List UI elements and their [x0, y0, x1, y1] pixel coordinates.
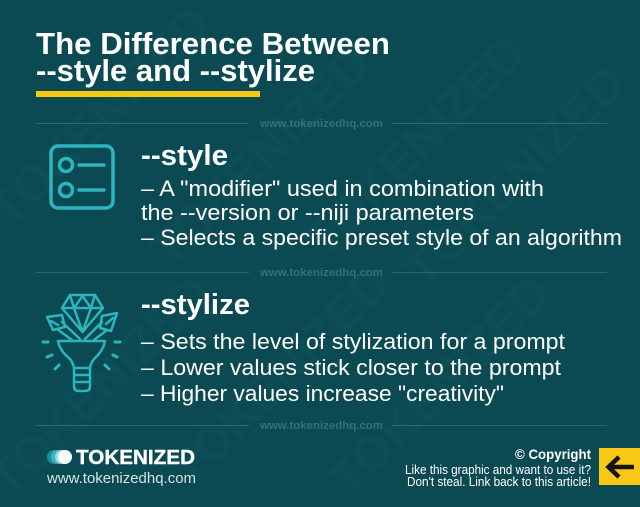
divider url 2: www.tokenizedhq.com — [259, 267, 383, 279]
yellow arrow box — [599, 448, 640, 485]
infographic canvas: TOKENIZED — [293, 25, 536, 268]
logo wordmark: TOKENIZED — [76, 446, 195, 469]
title underline — [36, 91, 260, 97]
divider url 3: www.tokenizedhq.com — [259, 420, 383, 432]
title — [36, 26, 390, 88]
copyright note: Like this graphic and want to use it? — [405, 462, 591, 477]
copyright heading: © Copyright — [515, 446, 591, 462]
style description — [141, 176, 622, 250]
stylize description: – Higher values increase "creativity" — [141, 381, 504, 406]
heading: style: --style — [141, 140, 228, 172]
logo mark — [47, 450, 72, 464]
title: The Difference Between — [36, 26, 390, 61]
infographic canvas: TOKENIZED — [138, 35, 381, 278]
stylize description: – Sets the level of stylization for a prompt — [141, 329, 566, 354]
divider url 1: www.tokenizedhq.com — [259, 118, 383, 130]
logo url: www.tokenizedhq.com — [46, 471, 196, 487]
infographic canvas: TOKENIZED — [318, 265, 561, 507]
style description: the --version or --niji parameters — [141, 200, 474, 225]
infographic canvas: TOKENIZED — [158, 255, 401, 498]
copyright note — [405, 462, 591, 489]
style description: – Selects a specific preset style of an algorithm — [141, 225, 622, 250]
title: --style and --stylize — [36, 53, 315, 88]
stylize description — [141, 329, 566, 406]
heading: stylize: --stylize — [141, 289, 250, 321]
infographic canvas: TOKENIZED — [393, 55, 636, 298]
icon: diamond, brushes and bulb — [43, 295, 120, 391]
style description: – A "modifier" used in combination with — [141, 176, 544, 201]
logo — [46, 446, 196, 487]
icon: list — [51, 146, 113, 208]
copyright note: Don't steal. Link back to this article! — [407, 474, 591, 489]
stylize description: – Lower values stick closer to the prompt — [141, 355, 562, 380]
